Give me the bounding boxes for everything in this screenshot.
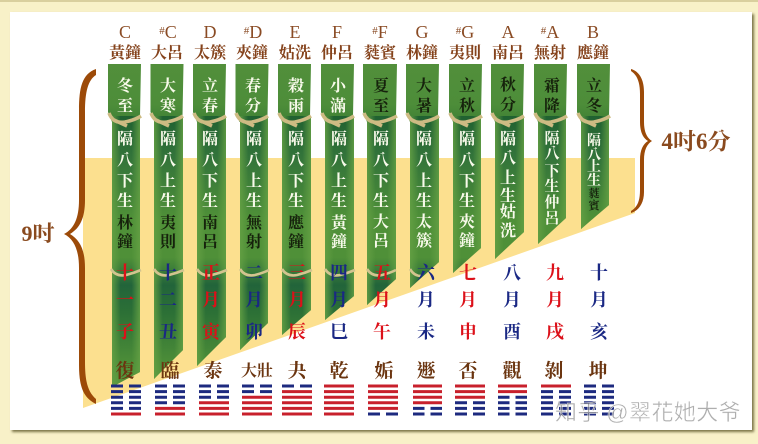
month and branch: 九月戌 xyxy=(546,263,564,342)
solar term: 大暑 xyxy=(416,77,432,115)
bamboo pipe xyxy=(321,64,355,320)
column: #D xyxy=(236,22,273,414)
produced note: 南呂 xyxy=(202,214,218,251)
header: #D 夾鐘 xyxy=(236,22,268,62)
column: #C xyxy=(150,22,185,414)
column: D xyxy=(193,22,229,414)
hexagram name: 否 xyxy=(458,359,478,382)
left brace: 9 cun xyxy=(64,69,96,404)
bamboo pipe xyxy=(406,64,439,288)
header: G 林鐘: G xyxy=(416,22,428,42)
month and branch: 四月巳 xyxy=(330,263,348,342)
hexagram xyxy=(584,386,614,414)
month and branch: 六月未 xyxy=(417,263,437,342)
bamboo pipe xyxy=(108,64,141,387)
hexagram name: 大壯 xyxy=(241,362,273,380)
column: G xyxy=(406,22,442,414)
hexagram name: 觀 xyxy=(502,359,522,382)
rule: 隔八下生 xyxy=(459,130,476,210)
bamboo pipe xyxy=(577,64,610,229)
column: #G xyxy=(449,22,485,414)
header: #C 大呂 xyxy=(151,22,183,62)
solar term: 秋分 xyxy=(500,76,516,114)
bamboo pipe xyxy=(278,64,312,335)
header: D 太簇: 太簇 xyxy=(194,43,227,62)
yellow pipe-length trapezoid xyxy=(83,158,635,408)
solar term: 小滿 xyxy=(330,77,348,115)
header: #A 無射 xyxy=(534,22,566,62)
header: #G 夷則: 夷則 xyxy=(449,43,481,62)
rule: 隔八上生 xyxy=(331,130,347,210)
header: #F 蕤賓 xyxy=(364,22,399,62)
header: #D 夾鐘: D xyxy=(249,22,262,42)
header: #G 夷則: # xyxy=(456,25,462,37)
header: #D 夾鐘: 夾鐘 xyxy=(236,44,268,62)
solar term: 冬至 xyxy=(117,76,133,115)
month and branch: 三月辰 xyxy=(288,263,306,342)
header: #F 蕤賓: F xyxy=(378,22,388,42)
solar term: 春分 xyxy=(245,76,261,115)
produced note: 仲呂 xyxy=(544,194,560,227)
bamboo pipe xyxy=(449,64,482,273)
bamboo pipe xyxy=(363,64,397,305)
rule: 隔八上生 xyxy=(246,130,262,210)
hexagram name: 夬 xyxy=(287,360,307,382)
hexagram xyxy=(155,386,185,414)
rule: 隔八上生 xyxy=(587,132,601,189)
header: F 仲呂: 仲呂 xyxy=(321,44,353,62)
rule: 隔八下生 xyxy=(373,130,390,210)
produced note: 夾鐘 xyxy=(459,213,476,250)
header: #F 蕤賓: # xyxy=(372,25,378,37)
hexagram name: 復 xyxy=(115,360,135,382)
bamboo pipe xyxy=(534,64,567,244)
header: F 仲呂: F xyxy=(332,22,342,42)
right brace: 4 cun 6 fen xyxy=(631,69,652,213)
header: #A 無射: 無射 xyxy=(534,43,566,62)
header: E 姑洗: 姑洗 xyxy=(279,43,311,62)
month and branch: 五月午 xyxy=(373,263,391,342)
solar term: 大寒 xyxy=(160,77,176,115)
header: A 南呂 xyxy=(492,22,524,62)
rule: 隔八上生 xyxy=(500,130,516,205)
solar term: 穀雨 xyxy=(288,76,304,115)
hexagram name: 姤 xyxy=(374,360,394,382)
header: B 應鐘: B xyxy=(587,22,599,42)
rule: 隔八下生 xyxy=(288,130,305,210)
header: G 林鐘 xyxy=(406,22,438,62)
label: 4 cun 6 fen: 4吋6分 xyxy=(662,129,730,154)
header: B 應鐘 xyxy=(577,22,609,62)
header: #C 大呂: # xyxy=(159,25,165,37)
header: #C 大呂: 大呂 xyxy=(151,44,183,62)
produced note: 大呂 xyxy=(373,213,389,250)
header: C 黃鐘 xyxy=(109,22,141,62)
header: #C 大呂: C xyxy=(165,22,177,42)
rule: 隔八下生 xyxy=(117,130,134,210)
hexagram xyxy=(455,386,485,414)
header: B 應鐘: 應鐘 xyxy=(577,43,609,62)
header: #A 無射: A xyxy=(546,22,559,42)
bamboo pipe xyxy=(491,64,524,259)
hexagram xyxy=(541,386,571,414)
header: #F 蕤賓: 蕤賓 xyxy=(364,43,399,62)
hexagram name: 坤 xyxy=(588,360,608,382)
header: C 黃鐘: 黃鐘 xyxy=(109,43,141,62)
column: #F xyxy=(363,22,399,414)
header: A 南呂: 南呂 xyxy=(492,44,524,62)
hexagram name: 遯 xyxy=(416,360,436,382)
header: #G 夷則: G xyxy=(461,22,474,42)
month and branch: 十月亥 xyxy=(590,263,608,342)
month and branch: 十一子 xyxy=(116,263,134,342)
solar term: 立春 xyxy=(202,77,218,115)
produced note: 林鐘 xyxy=(117,213,133,251)
hexagram name: 臨 xyxy=(160,359,180,382)
column: F xyxy=(321,22,355,414)
produced note: 太簇 xyxy=(416,213,433,250)
column: B xyxy=(577,22,614,414)
header: F 仲呂 xyxy=(321,22,353,62)
header: #D 夾鐘: # xyxy=(244,25,250,37)
header: G 林鐘: 林鐘 xyxy=(406,43,438,62)
header: D 太簇 xyxy=(194,22,227,62)
column: E xyxy=(278,22,312,414)
hexagram xyxy=(368,386,398,414)
rule: 隔八上生 xyxy=(416,130,432,210)
label: 9 cun: 9吋 xyxy=(21,221,55,246)
header: E 姑洗: E xyxy=(290,22,300,42)
hexagram xyxy=(242,386,272,414)
header: C 黃鐘: C xyxy=(119,22,131,42)
rule: 隔八下生 xyxy=(202,130,219,210)
solar term: 立冬 xyxy=(586,77,602,115)
solar term: 夏至 xyxy=(373,76,389,115)
produced note: 無射 xyxy=(246,213,263,251)
month and branch: 二月卯 xyxy=(245,263,263,342)
month and branch: 七月申 xyxy=(459,263,477,342)
hexagram name: 乾 xyxy=(329,360,349,382)
month and branch: 八月酉 xyxy=(503,263,521,342)
bamboo pipe xyxy=(150,64,184,379)
produced note: 夷則 xyxy=(160,213,176,251)
column: #A xyxy=(534,22,571,414)
solar term: 立秋 xyxy=(459,77,475,115)
hexagram xyxy=(498,386,527,414)
hexagram xyxy=(413,386,442,414)
hexagram xyxy=(324,386,354,414)
bamboo pipe xyxy=(236,64,269,350)
solar term: 霜降 xyxy=(544,76,560,115)
header: D 太簇: D xyxy=(204,22,216,42)
watermark: 知乎 @翠花她大爷 xyxy=(555,400,741,425)
rule: 隔八上生 xyxy=(160,130,176,210)
bamboo pipe xyxy=(193,64,227,366)
header: E 姑洗 xyxy=(279,22,311,62)
header: #A 無射: # xyxy=(541,25,547,37)
hexagram name: 剝 xyxy=(544,360,564,382)
produced note: 應鐘 xyxy=(288,213,305,251)
month and branch: 十二丑 xyxy=(159,263,177,342)
hexagram xyxy=(199,386,229,414)
hexagram name: 泰 xyxy=(203,359,223,382)
rule: 隔八下生 xyxy=(544,129,560,195)
hexagram xyxy=(282,386,312,414)
produced note: 蕤賓 xyxy=(588,186,602,212)
produced note: 姑洗 xyxy=(500,202,516,240)
header: #G 夷則 xyxy=(449,22,481,62)
hexagram xyxy=(111,386,141,414)
column: C xyxy=(108,22,141,414)
month and branch: 正月寅 xyxy=(202,263,222,342)
header: A 南呂: A xyxy=(502,22,514,42)
produced note: 黃鐘 xyxy=(331,213,349,251)
column: A xyxy=(491,22,527,414)
